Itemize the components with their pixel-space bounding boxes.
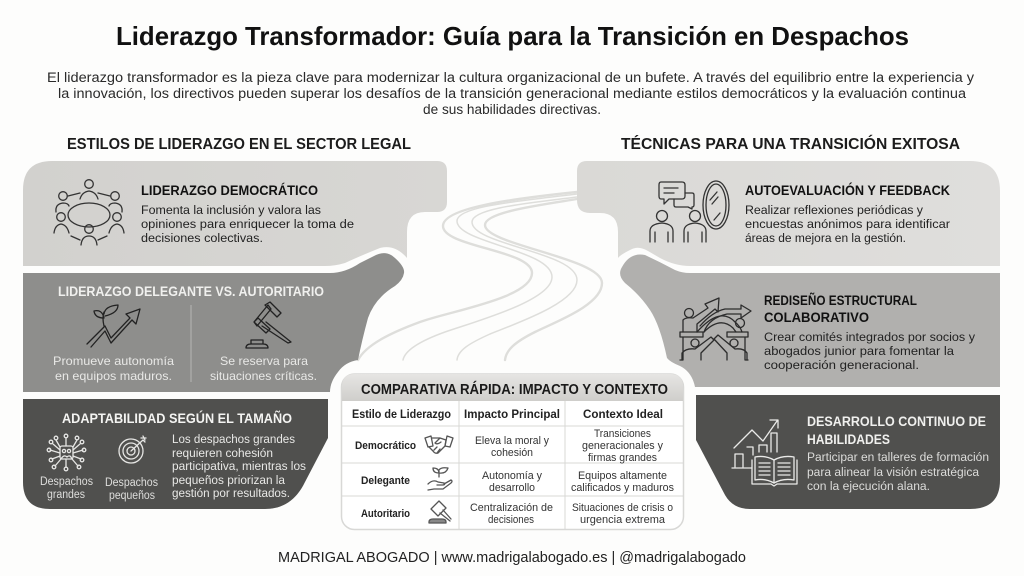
text: delegante: [53, 354, 174, 383]
description: decisiones colectivas.: [141, 231, 263, 245]
heading: LIDERAZGO DEMOCRÁTICO: [141, 183, 318, 198]
column headers: Estilo de Liderazgo: [352, 407, 451, 421]
heading: LIDERAZGO DELEGANTE VS. AUTORITARIO: [58, 284, 324, 299]
panel: adaptabilidad: [23, 399, 328, 509]
icon: plant in hand: [428, 468, 452, 490]
comparison table: [342, 374, 684, 530]
heading: HABILIDADES: [807, 432, 890, 447]
description: participativa, mientras los: [172, 459, 306, 473]
heading: [764, 293, 917, 325]
icon: target: [119, 436, 146, 463]
description: con la ejecución alana.: [807, 479, 930, 493]
row labels: Autoritario: [361, 508, 410, 520]
heading: AUTOEVALUACIÓN Y FEEDBACK: [745, 183, 950, 198]
description: requieren cohesión: [172, 446, 273, 460]
description: [172, 432, 306, 500]
description: [764, 330, 976, 372]
heading: [807, 414, 986, 447]
table title: COMPARATIVA RÁPIDA: IMPACTO Y CONTEXTO: [361, 381, 668, 398]
column: contexto ideal: [571, 428, 674, 526]
text: autoritario: [210, 354, 317, 383]
column: impacto principal: desarrollo: [489, 482, 535, 494]
heading: DESARROLLO CONTINUO DE: [807, 414, 986, 429]
column: impacto principal: [470, 435, 553, 526]
description: encuestas anónimos para identificar: [745, 217, 950, 231]
intro text: El liderazgo transformador es la pieza clave para modernizar la cultura organizacional de un bufete. A través del equilibrio entre la experiencia y: [47, 70, 974, 85]
description: para alinear la visión estratégica: [807, 465, 979, 479]
intro text: la innovación, los directivos pueden superar los desafíos de la transición generacional mediante estilos democráticos y la evaluación continua: [58, 86, 967, 101]
description: [807, 450, 989, 493]
labels: Despachos: [40, 476, 93, 488]
intro text: [47, 70, 974, 117]
heading: COLABORATIVO: [764, 310, 869, 325]
icon: collaborative bridge: [680, 298, 751, 360]
column headers: Impacto Principal: [464, 407, 560, 421]
panel: liderazgo democrático: [23, 161, 447, 266]
column: contexto ideal: Situaciones de crisis o: [572, 502, 673, 514]
intro text: de sus habilidades directivas.: [423, 102, 601, 117]
panel: delegante vs autoritario: [23, 253, 404, 392]
description: Los despachos grandes: [172, 432, 295, 446]
labels: grandes: [47, 489, 85, 501]
column: impacto principal: Centralización de: [470, 502, 553, 514]
text: autoritario: Se reserva para: [220, 354, 308, 368]
column: contexto ideal: Equipos altamente: [578, 470, 667, 482]
panel: rediseño estructural: [620, 254, 1000, 387]
description: pequeños priorizan la: [172, 473, 285, 487]
icon: gavel: [246, 302, 291, 348]
table header band: [342, 374, 683, 401]
text: delegante: Promueve autonomía: [53, 354, 174, 368]
description: Fomenta la inclusión y valora las: [141, 203, 321, 217]
icon: chart and book: [732, 420, 797, 486]
description: opiniones para enriquecer la toma de: [141, 217, 354, 231]
icon: network: [47, 434, 86, 471]
panel: desarrollo continuo: [696, 395, 1000, 509]
title: Liderazgo Transformador: Guía para la Transición en Despachos: [116, 21, 909, 51]
description: áreas de mejora en la gestión.: [745, 231, 906, 245]
column: contexto ideal: firmas grandes: [588, 452, 657, 464]
footer: MADRIGAL ABOGADO | www.madrigalabogado.es | @madrigalabogado: [278, 550, 746, 566]
column: impacto principal: decisiones: [488, 514, 534, 526]
column: impacto principal: cohesión: [491, 447, 533, 459]
column headers: [352, 407, 663, 421]
divider: [190, 305, 192, 382]
road illustration: [358, 192, 602, 360]
heading: REDISEÑO ESTRUCTURAL: [764, 293, 917, 308]
column headers: Contexto Ideal: [583, 407, 663, 421]
description: [745, 203, 950, 245]
description: Realizar reflexiones periódicas y: [745, 203, 924, 217]
icon: small gavel: [429, 501, 451, 523]
column: impacto principal: Autonomía y: [482, 470, 542, 482]
description: cooperación generacional.: [764, 358, 919, 372]
text: autoritario: situaciones críticas.: [210, 369, 317, 383]
row labels: Delegante: [361, 475, 410, 487]
icon: people around table: [54, 180, 124, 245]
description: gestión por resultados.: [172, 486, 290, 500]
column: contexto ideal: urgencia extrema: [580, 514, 666, 526]
icon: growth arrow with leaves: [87, 305, 140, 347]
column: contexto ideal: Transiciones: [594, 428, 651, 440]
row labels: Democrático: [355, 440, 416, 452]
labels: pequeños: [109, 490, 155, 502]
row labels: [355, 440, 416, 520]
panel: autoevaluación: [577, 161, 1000, 266]
description: Crear comités integrados por socios y: [764, 330, 976, 344]
icon: feedback and mirror: [650, 181, 729, 242]
column: contexto ideal: generacionales y: [582, 440, 663, 452]
icon: handshake: [425, 436, 453, 453]
column: contexto ideal: calificados y maduros: [571, 482, 674, 494]
heading: estilos de liderazgo: ESTILOS DE LIDERAZGO EN EL SECTOR LEGAL: [67, 136, 411, 153]
heading: técnicas: TÉCNICAS PARA UNA TRANSICIÓN EXITOSA: [621, 134, 960, 153]
description: [141, 203, 354, 245]
description: abogados junior para fomentar la: [764, 344, 954, 358]
column: impacto principal: Eleva la moral y: [475, 435, 549, 447]
labels: Despachos: [105, 477, 158, 489]
description: Participar en talleres de formación: [807, 450, 989, 464]
heading: ADAPTABILIDAD SEGÚN EL TAMAÑO: [62, 409, 292, 426]
text: delegante: en equipos maduros.: [55, 369, 172, 383]
labels: [40, 476, 158, 502]
